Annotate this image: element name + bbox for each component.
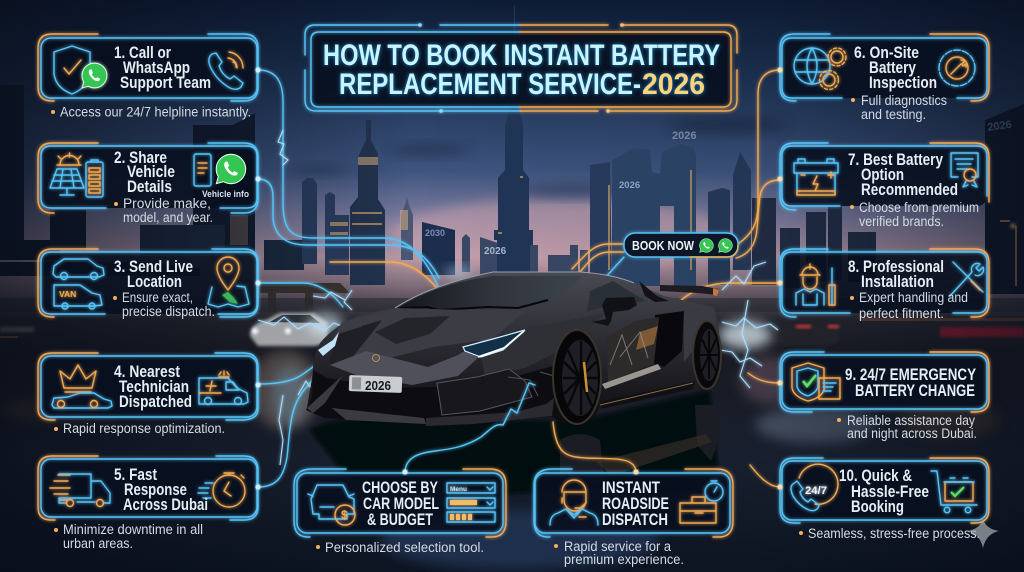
- panel 3: send live location: [38, 249, 260, 319]
- heading: [114, 363, 192, 411]
- heading: 2. Share: [114, 149, 167, 167]
- panel 7: best battery option recommended: [778, 143, 989, 229]
- connector lines to right panels: [572, 70, 780, 487]
- heading: [114, 466, 208, 514]
- bullet text: [850, 200, 979, 229]
- panel 10: quick and hassle-free booking: [778, 458, 989, 541]
- city skyline: 2026: [987, 119, 1013, 134]
- bullet text: Access our 24/7 helpline instantly.: [60, 104, 251, 120]
- heading: Across Dubai: [123, 496, 208, 514]
- heading: 10. Quick &: [839, 467, 912, 485]
- bullet text: Seamless, stress-free process.: [808, 526, 980, 541]
- city skyline: 2026: [484, 246, 507, 257]
- icon: shield with check and WhatsApp: [54, 46, 107, 94]
- book now button: [624, 233, 738, 257]
- icon: car with dollar coin: [308, 485, 355, 525]
- bright energy glow: [272, 267, 771, 425]
- city skyline: 2026: [619, 180, 640, 191]
- panel 9: 24/7 emergency battery change: [778, 352, 989, 441]
- heading: 3. Send Live: [114, 258, 193, 276]
- bullet text: premium experience.: [564, 552, 684, 567]
- bullet text: Ensure exact,: [122, 290, 193, 305]
- title panel: [305, 23, 737, 113]
- heading: [114, 44, 211, 92]
- sports car: [306, 272, 721, 426]
- heading: [854, 44, 937, 92]
- city skyline: [0, 5, 1024, 315]
- icon: globe with gears: [794, 48, 846, 90]
- panel 8: professional installation: [778, 249, 989, 321]
- heading: [845, 366, 976, 400]
- panel 2: share vehicle details: [38, 143, 260, 225]
- heading: 1. Call or: [114, 44, 171, 62]
- icon: car and van: VAN: [59, 289, 76, 299]
- bullet text: Reliable assistance day: [847, 413, 975, 428]
- heading: [114, 258, 193, 291]
- front bumper: [306, 356, 582, 426]
- door reflection: [607, 317, 659, 383]
- icon: phone and WhatsApp with label: [194, 154, 249, 199]
- heading: Response: [124, 481, 187, 499]
- headlights: [463, 330, 525, 357]
- icon: 24/7 phone clock: [791, 464, 838, 511]
- panel 1: call or WhatsApp: [38, 34, 260, 120]
- bullet text: urban areas.: [63, 536, 133, 551]
- car reflection on wet road: [310, 390, 721, 499]
- heading: 5. Fast: [114, 466, 157, 484]
- background traffic cars: [250, 313, 840, 346]
- heading: 9. 24/7 EMERGENCY: [845, 366, 976, 384]
- bullet text: and night across Dubai.: [847, 426, 977, 441]
- city skyline: 2030: [425, 228, 445, 238]
- bullet text: verified brands.: [859, 214, 944, 229]
- icon: cart with battery: [931, 471, 977, 513]
- icon: shield and certificate: [792, 363, 840, 401]
- bullet text: and testing.: [861, 107, 926, 122]
- bullet text: [54, 522, 203, 551]
- heading: Booking: [851, 498, 904, 516]
- heading: 7. Best Battery: [848, 151, 944, 169]
- bullet text: Provide make,: [123, 196, 211, 211]
- bullet text: Expert handling and: [859, 290, 968, 305]
- panel 6: on-site battery inspection: [778, 34, 989, 122]
- heading: DISPATCH: [602, 511, 668, 529]
- front wheel: [553, 330, 601, 424]
- bullet text: [850, 290, 968, 321]
- heading: Battery: [869, 59, 917, 77]
- road with streaks and reflections: [0, 298, 1024, 570]
- icon: crossed tools: [950, 262, 984, 296]
- heading: 6. On-Site: [854, 44, 919, 62]
- icon: gear with wrench: [939, 50, 975, 86]
- heading: [839, 467, 929, 516]
- heading: Inspection: [869, 74, 937, 92]
- icon: service van: [199, 371, 248, 404]
- number plate: 2026: [365, 379, 391, 393]
- bullet text: Full diagnostics: [861, 93, 947, 108]
- lightning arcs around the car: [258, 130, 778, 465]
- heading: [114, 149, 175, 196]
- mirror: [592, 297, 637, 326]
- connector lines from left panels and bottom panels: [258, 70, 440, 487]
- bullet text: Rapid service for a: [564, 539, 671, 554]
- icon: stopwatch: [198, 473, 245, 507]
- icon: toolbox and stopwatch: [680, 481, 723, 523]
- icon: delivery truck: [50, 474, 110, 506]
- bullet text: [113, 290, 215, 319]
- icon: solar panel and battery: [50, 153, 103, 197]
- panel: choose by car model and budget: [294, 469, 506, 555]
- bullet text: [554, 539, 684, 567]
- icon: map with location pin: [208, 257, 249, 307]
- heading: [848, 258, 944, 291]
- windshield: [398, 276, 582, 309]
- hood panels: [332, 308, 527, 365]
- heading: Support Team: [120, 74, 211, 92]
- heading: INSTANT: [602, 479, 660, 497]
- heading: Technician: [119, 378, 189, 396]
- bullet text: [837, 413, 977, 441]
- heading: [848, 151, 958, 199]
- title text: HOW TO BOOK INSTANT BATTERY: [323, 39, 720, 72]
- icon: menu selectors: [447, 483, 495, 522]
- heading: CAR MODEL: [363, 495, 439, 513]
- panel: instant roadside dispatch: [534, 469, 733, 567]
- heading: BATTERY CHANGE: [855, 382, 975, 400]
- side windows: [587, 281, 646, 312]
- icon: menu selectors: Menu: [450, 486, 467, 493]
- heading: Dispatched: [119, 393, 192, 411]
- heading: WhatsApp: [123, 59, 190, 77]
- bullet text: Rapid response optimization.: [63, 421, 225, 436]
- heading: Installation: [861, 273, 934, 291]
- icon: phone with signal: [209, 52, 243, 89]
- title text: REPLACEMENT SERVICE-: [339, 68, 641, 101]
- side intake: [652, 311, 684, 367]
- heading: [362, 479, 439, 529]
- icon: worker with wrench: [796, 264, 835, 305]
- car body: [307, 272, 719, 424]
- bullet text: Minimize downtime in all: [63, 522, 203, 537]
- heading: [602, 479, 669, 529]
- heading: 8. Professional: [848, 258, 944, 276]
- sparkle watermark: [967, 519, 999, 548]
- heading: Recommended: [861, 181, 958, 199]
- heading: Option: [861, 166, 904, 184]
- rear haunch: [684, 310, 718, 362]
- icon: 24/7 phone clock: 24/7: [805, 485, 827, 497]
- heading: Details: [127, 178, 172, 196]
- bullet text: precise dispatch.: [122, 304, 215, 319]
- bullet text: perfect fitment.: [859, 306, 944, 321]
- icon: car with dollar coin: $: [341, 508, 348, 522]
- bullet text: Personalized selection tool.: [325, 540, 484, 555]
- heading: Location: [127, 273, 182, 291]
- rear wing: [660, 285, 718, 295]
- bullet text: Choose from premium: [859, 200, 979, 215]
- heading: CHOOSE BY: [362, 479, 438, 497]
- book now button: BOOK NOW: [632, 238, 695, 253]
- icon: certificate with rosette: [951, 153, 978, 187]
- bullet text: [851, 93, 947, 122]
- icon: crown and sports car: [52, 365, 112, 408]
- number plate: [349, 375, 402, 393]
- panel 4: nearest technician dispatched: [38, 353, 260, 436]
- heading: Vehicle: [127, 163, 175, 181]
- lightning and neon lines over the reflection: [405, 383, 636, 473]
- icon: car battery: [794, 159, 838, 195]
- heading: 4. Nearest: [114, 363, 180, 381]
- icon: technician with headset: [550, 480, 598, 525]
- heading: Hassle-Free: [851, 483, 929, 501]
- heading: & BUDGET: [367, 511, 433, 529]
- bullet text: [114, 196, 213, 225]
- bullet text: model, and year.: [123, 210, 213, 225]
- panel 5: fast response across Dubai: [38, 456, 260, 551]
- icon: car and van: [53, 259, 104, 309]
- icon: phone and WhatsApp with label: Vehicle info: [202, 189, 249, 199]
- city skyline: 2026: [672, 130, 696, 142]
- title text: 2026: [642, 68, 705, 101]
- heading: ROADSIDE: [602, 495, 669, 513]
- rear wheel: [693, 321, 721, 389]
- title text: [323, 39, 720, 101]
